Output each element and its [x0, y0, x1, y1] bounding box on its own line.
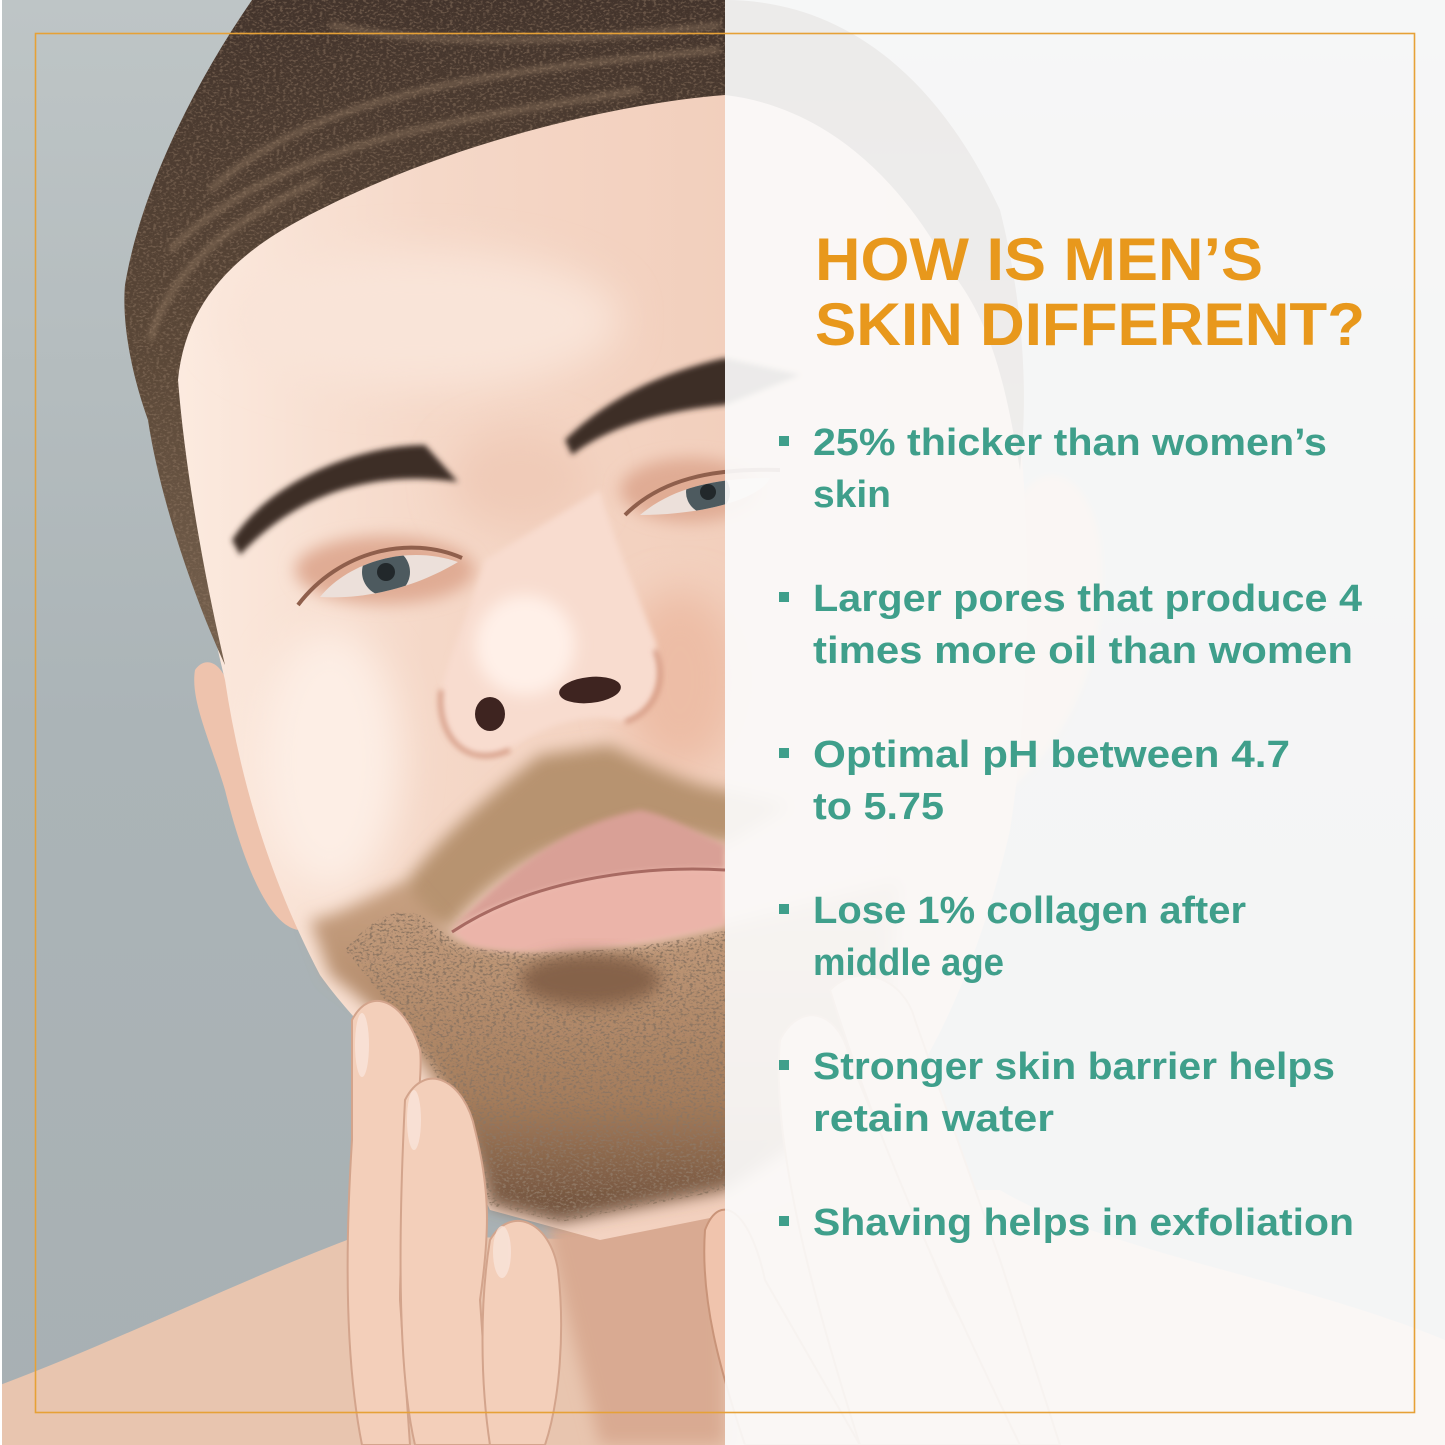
- item: larger pores: Larger pores that produce 4: [813, 578, 1362, 620]
- item: shaving: Shaving helps in exfoliation: [813, 1202, 1354, 1244]
- upper lip: [450, 810, 725, 930]
- hair strands: [150, 25, 720, 340]
- nostril right: [558, 674, 622, 706]
- item: collagen loss: [779, 890, 1246, 984]
- eyebrow right: [565, 358, 800, 455]
- beard: [310, 880, 900, 1222]
- item: skin barrier: Stronger skin barrier helps: [813, 1046, 1335, 1088]
- nose highlight: [475, 595, 575, 695]
- face shading: [220, 250, 740, 890]
- item: skin barrier: [779, 1046, 1335, 1140]
- beard stubble texture: [345, 912, 725, 1222]
- brow shade: [458, 438, 572, 522]
- title: SKIN DIFFERENT?: [815, 291, 1365, 358]
- upper lid right: [625, 470, 780, 515]
- photo: man touching his beard: [2, 0, 1024, 1445]
- eye left: [320, 555, 458, 598]
- upper lid left: [298, 548, 462, 605]
- face: [172, 85, 1028, 1240]
- translucent white panel: [725, 0, 1445, 1445]
- hair: [124, 0, 1024, 665]
- item: collagen loss: Lose 1% collagen after: [813, 890, 1246, 932]
- neck shadow: [545, 1185, 725, 1445]
- title: HOW IS MEN’S: [815, 226, 1263, 293]
- eye socket left: [295, 536, 475, 604]
- nose outline: [440, 650, 660, 756]
- item: thicker skin: skin: [813, 474, 891, 516]
- forehead highlight: [344, 250, 622, 390]
- left hand fingers: [348, 1001, 561, 1445]
- cheek tone: [620, 590, 740, 770]
- item: optimal pH: [779, 734, 1290, 828]
- nostril left: [475, 697, 505, 731]
- hair texture: [124, 0, 725, 665]
- eye right: [640, 480, 730, 515]
- item: collagen loss: middle age: [813, 942, 1004, 984]
- item: optimal pH: Optimal pH between 4.7: [813, 734, 1290, 776]
- left white edge: [0, 0, 2, 1445]
- lower lip: [452, 869, 725, 951]
- title: [815, 226, 1365, 358]
- moustache: [385, 745, 790, 930]
- item: larger pores: times more oil than women: [813, 630, 1353, 672]
- item: optimal pH: to 5.75: [813, 786, 944, 828]
- shoulders: [0, 1190, 1445, 1445]
- item: thicker skin: [779, 422, 1327, 516]
- right hand fingers: [704, 976, 1060, 1445]
- eye socket right: [620, 458, 760, 522]
- soul patch: [520, 954, 660, 1006]
- ear right: [1010, 475, 1102, 790]
- lip line: [452, 869, 725, 932]
- cheek glow: [260, 630, 400, 890]
- item: skin barrier: retain water: [813, 1098, 1054, 1140]
- item: thicker skin: 25% thicker than women’s: [813, 422, 1327, 464]
- nose: [440, 490, 659, 755]
- item: larger pores: [779, 578, 1362, 672]
- ear left: [194, 662, 298, 930]
- list of skin differences: [779, 422, 1362, 1244]
- finger nails: [355, 1013, 511, 1278]
- eyebrow left: [232, 445, 458, 555]
